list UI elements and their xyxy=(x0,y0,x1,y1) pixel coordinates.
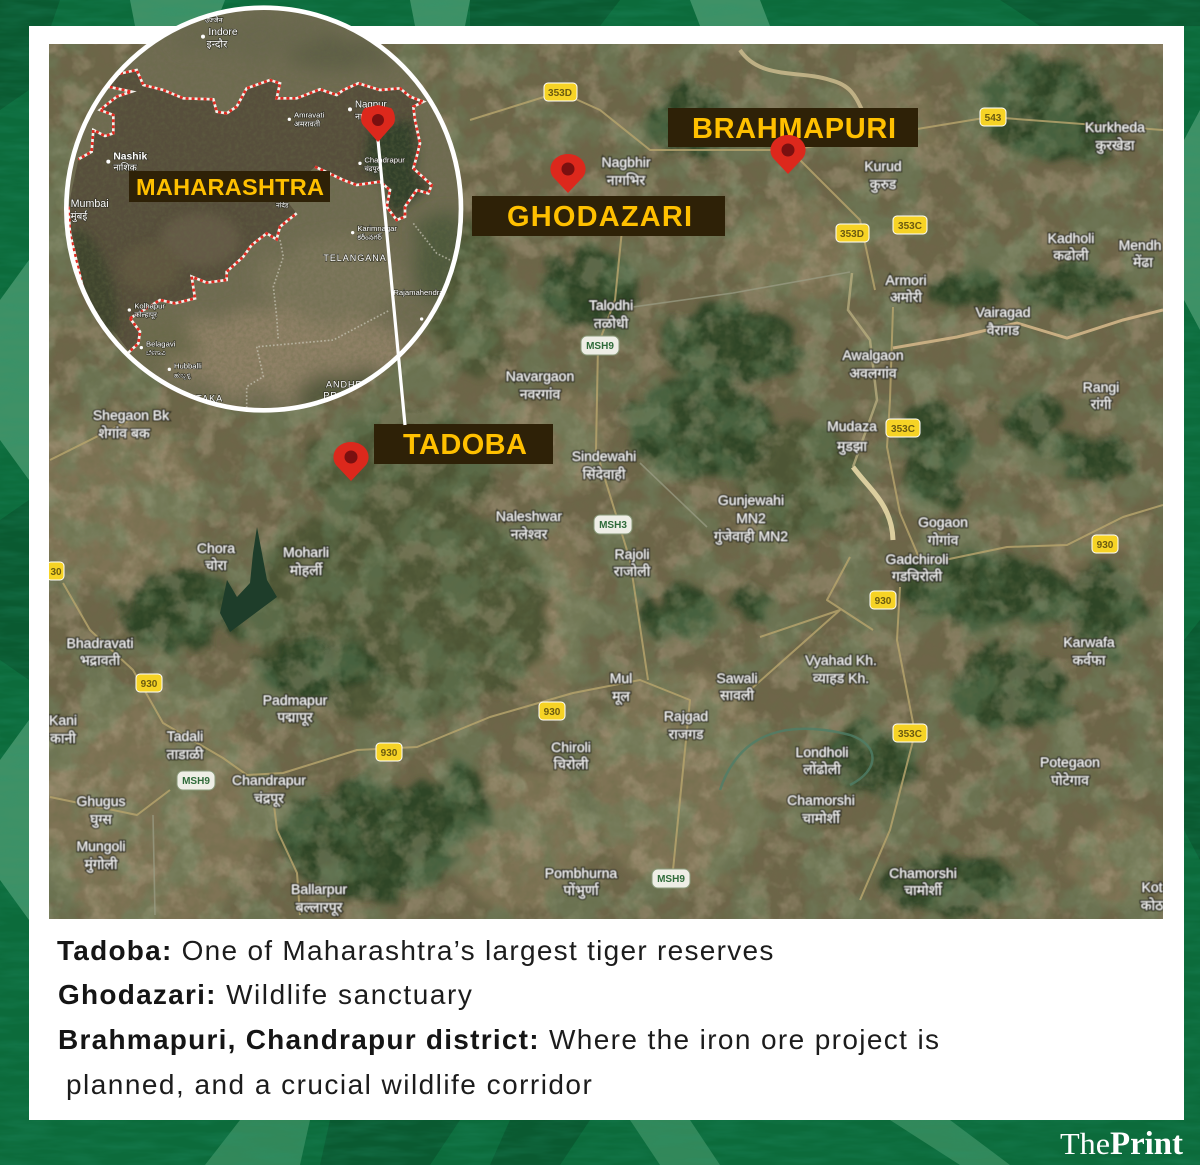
map place labels: मुंगोली xyxy=(84,856,118,873)
map place labels: अमोरी xyxy=(890,289,922,305)
label: Brahmapuri: BRAHMAPURI xyxy=(692,113,896,145)
map place labels: Shegaon Bk xyxy=(93,407,170,423)
label: Ghodazari: GHODAZARI xyxy=(507,201,692,233)
road shields: MSH9 xyxy=(182,776,210,787)
inset place labels: Indore xyxy=(208,27,238,38)
pin: inset xyxy=(361,105,395,142)
pin: Ghodazari xyxy=(550,154,586,193)
inset place labels: नांदेड xyxy=(276,201,289,209)
map place labels: Mendh xyxy=(1119,237,1161,253)
inset place labels: ANDHRA xyxy=(326,379,370,389)
label: Maharashtra: MAHARASHTRA xyxy=(136,174,324,200)
map place labels: Gadchiroli xyxy=(885,551,949,567)
inset place labels: Nagpur xyxy=(355,99,387,110)
map place labels: चंद्रपूर xyxy=(254,790,284,807)
inset place labels: PRADESH xyxy=(323,391,374,401)
map place labels: Vairagad xyxy=(975,304,1031,320)
map place labels: Rajgad xyxy=(664,708,708,724)
map place labels: Tadali xyxy=(167,728,203,744)
map place labels: राजगड xyxy=(668,726,704,742)
map place labels: Chora xyxy=(197,540,235,556)
map place labels: Sindewahi xyxy=(572,448,636,464)
map place labels: Londholi xyxy=(796,744,848,760)
road shields: MSH9 xyxy=(586,341,614,352)
map place labels: कढोली xyxy=(1053,247,1089,263)
map place labels: पोटेगाव xyxy=(1051,772,1089,788)
map place labels xyxy=(49,119,1164,916)
map place labels: घुग्स xyxy=(90,811,112,828)
road shields xyxy=(47,83,1118,888)
map place labels: Chandrapur xyxy=(232,772,306,788)
map place labels: नागभिर xyxy=(607,172,646,188)
map place labels: भद्रावती xyxy=(80,652,121,668)
inset place labels: इन्दौर xyxy=(207,37,228,50)
inset place labels: Mumbai xyxy=(71,198,109,210)
caption line: Tadoba: Tadoba: One of Maharashtra’s largest tiger reserves xyxy=(57,935,775,966)
inset place labels: कोल्हापूर xyxy=(134,310,157,319)
map place labels: नलेश्वर xyxy=(511,526,548,542)
Maharashtra region xyxy=(68,70,432,353)
map place labels: Kurud xyxy=(864,158,902,174)
inset place labels: కరీంనగర్ xyxy=(357,233,383,241)
map place labels: Rajoli xyxy=(614,546,650,562)
map place labels: शेगांव बक xyxy=(98,425,150,441)
inset place labels: ATAKA xyxy=(190,393,223,403)
map place labels: Moharli xyxy=(283,544,329,560)
inset place labels: ಬೆಳಗಾವಿ xyxy=(146,350,166,357)
map place labels: Padmapur xyxy=(263,692,328,708)
map place labels: MN2 xyxy=(736,510,766,526)
inset place labels: Amravati xyxy=(294,111,325,120)
inset place labels: अमरावती xyxy=(294,119,321,128)
map place labels: Awalgaon xyxy=(842,347,904,363)
map place labels: Ballarpur xyxy=(291,881,347,897)
satellite map xyxy=(20,44,1170,930)
map place labels: कुरखेडा xyxy=(1095,137,1135,154)
label: Tadoba: TADOBA xyxy=(403,429,527,461)
map place labels: Sawali xyxy=(716,670,758,686)
map place labels: अवलगांव xyxy=(849,365,897,381)
map place labels: Chamorshi xyxy=(787,792,855,808)
map place labels: Kadholi xyxy=(1048,230,1094,246)
road shields: 930 xyxy=(875,596,892,607)
map place labels: मुडझा xyxy=(837,438,867,455)
road shields: 353C xyxy=(898,729,922,740)
label: Ghodazari xyxy=(472,196,725,236)
map place labels: Gogaon xyxy=(918,514,968,530)
caption line: Ghodazari: Ghodazari: Wildlife sanctuary xyxy=(58,979,473,1010)
map place labels: Kurkheda xyxy=(1085,119,1145,135)
map place labels: Ghugus xyxy=(76,793,126,809)
map place labels: नवरगांव xyxy=(520,386,560,402)
map place labels: ताडाळी xyxy=(166,746,204,762)
map place labels: Naleshwar xyxy=(496,508,562,524)
map place labels: Gunjewahi xyxy=(718,492,784,508)
map place labels: कानी xyxy=(50,730,76,746)
inset place labels: Chandrapur xyxy=(364,155,405,164)
logo: ThePrint: Print xyxy=(1110,1126,1183,1162)
caption line: Brahmapuri: Brahmapuri, Chandrapur district: Where the iron ore project is xyxy=(58,1024,940,1055)
inset place labels: Rajamahendravaram xyxy=(393,288,465,297)
road shields: 930 xyxy=(141,679,158,690)
inset place labels: Nashik xyxy=(113,152,147,163)
road shields: MSH3 xyxy=(599,520,627,531)
map place labels: Mungoli xyxy=(76,838,126,854)
pin: Tadoba xyxy=(333,442,369,481)
map place labels: Chiroli xyxy=(551,739,591,755)
map place labels: Armori xyxy=(885,272,927,288)
caption line: corridor: planned, and a crucial wildlife corridor xyxy=(66,1069,593,1100)
map place labels: मेंढा xyxy=(1133,254,1153,270)
map place labels: कुरुड xyxy=(870,176,897,193)
map place labels: चामोर्शी xyxy=(802,810,841,826)
map place labels: पोंभुर्णा xyxy=(563,882,600,899)
map place labels: Vyahad Kh. xyxy=(805,652,877,668)
inset place labels: ಹುಬ್ಬಳ್ಳಿ xyxy=(174,372,191,381)
map place labels: गोगांव xyxy=(928,532,959,548)
inset place labels: Belagavi xyxy=(146,340,176,349)
map place labels: Talodhi xyxy=(589,297,633,313)
map place labels: Mul xyxy=(610,670,632,686)
map place labels: कोठ xyxy=(1141,897,1164,913)
inset place labels xyxy=(71,16,465,403)
label: Tadoba xyxy=(374,424,553,464)
road shields: MSH9 xyxy=(657,874,685,885)
map place labels: Kot xyxy=(1141,879,1163,895)
map place labels: पद्मापूर xyxy=(277,709,313,726)
map place labels: मोहर्ली xyxy=(290,562,324,578)
map place labels: चामोर्शी xyxy=(904,882,943,898)
inset place labels: उज्जैन xyxy=(205,16,224,25)
inset place labels: Hubballi xyxy=(174,361,202,370)
map place labels: Navargaon xyxy=(506,368,574,384)
map place labels: मूल xyxy=(612,688,630,705)
map place labels: चोरा xyxy=(205,557,227,573)
caption text xyxy=(57,935,940,1100)
map place labels: लोंढोली xyxy=(803,761,841,777)
map place labels: बल्लारपूर xyxy=(296,899,343,916)
inset place labels: Karimnagar xyxy=(357,224,397,233)
map place labels: वैरागड xyxy=(987,322,1020,338)
road shields: 930 xyxy=(381,748,398,759)
roads and rivers xyxy=(50,92,1163,915)
road shields: 353C xyxy=(898,221,922,232)
road shields: 30 xyxy=(50,567,62,578)
map place labels: Rangi xyxy=(1083,379,1119,395)
road shields: 353D xyxy=(548,88,572,99)
label: Brahmapuri xyxy=(668,108,918,147)
logo: ThePrint: The xyxy=(1060,1126,1110,1161)
map place labels: Chamorshi xyxy=(889,865,957,881)
map place labels: Kani xyxy=(49,712,77,728)
inset locator map: Maharashtra xyxy=(50,0,480,420)
Maharashtra border xyxy=(68,70,432,353)
map place labels: Bhadravati xyxy=(67,635,133,651)
road shields: 543 xyxy=(985,113,1002,124)
logo: ThePrint xyxy=(1060,1126,1183,1162)
map place labels: चिरोली xyxy=(554,756,589,772)
map place labels: Karwafa xyxy=(1063,634,1115,650)
map place labels: Mudaza xyxy=(827,418,877,434)
inset place labels: नाशिक xyxy=(113,162,138,173)
map place labels: गुंजेवाही MN2 xyxy=(714,528,788,545)
inset place labels: मुंबई xyxy=(71,210,88,222)
leader line xyxy=(378,140,405,425)
road shields: 930 xyxy=(544,707,561,718)
pin: Brahmapuri xyxy=(770,135,806,174)
inset place labels: चंद्रपूर xyxy=(364,165,379,173)
map place labels: Potegaon xyxy=(1040,754,1100,770)
inset place labels: नागपूर xyxy=(355,111,376,122)
map place labels: व्याहड Kh. xyxy=(813,670,869,686)
map place labels: तळोधी xyxy=(594,315,629,331)
map place labels: रांगी xyxy=(1091,396,1112,412)
inset place labels: Kolhapur xyxy=(134,302,165,311)
road shields: 353D xyxy=(840,229,864,240)
map place labels: कर्वफा xyxy=(1073,652,1106,668)
map place labels: सिंदेवाही xyxy=(582,466,626,482)
inset place labels: TELANGANA xyxy=(323,253,387,263)
map place labels: सावली xyxy=(720,687,754,703)
road shields: 353C xyxy=(891,424,915,435)
map place labels: राजोली xyxy=(614,563,651,579)
map place labels: गडचिरोली xyxy=(892,568,943,584)
road shields: 930 xyxy=(1097,540,1114,551)
map place labels: Nagbhir xyxy=(601,154,651,170)
map place labels: Pombhurna xyxy=(545,865,617,881)
